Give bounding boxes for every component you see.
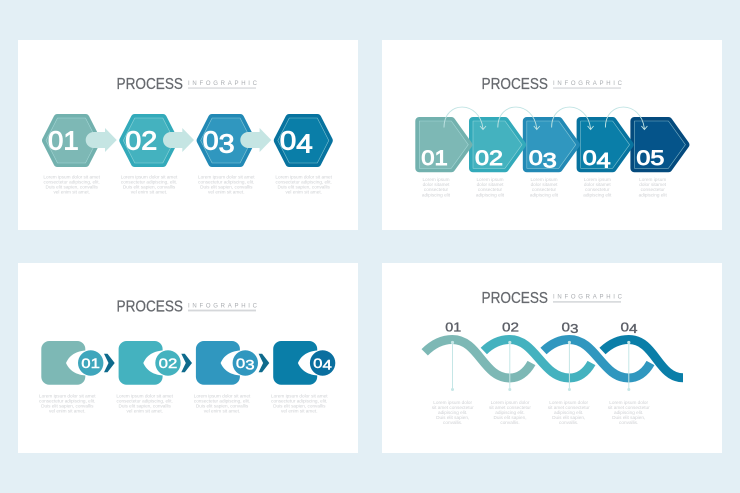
step 1 marker <box>451 341 454 391</box>
chevron 2 <box>181 354 192 372</box>
chevron 1 <box>104 354 115 372</box>
step 1 badge <box>41 341 103 385</box>
step 2 text: Duis elit sapien, convallis <box>123 184 176 189</box>
step 2 text: dolor sitamet <box>477 182 504 187</box>
number 02: 02 <box>502 320 519 335</box>
step 3 text: Lorem ipsum dolor sit amet <box>198 174 255 179</box>
step 4 hexagon: 4 <box>296 128 313 158</box>
step 4 badge: 0 <box>313 355 321 371</box>
step 1 text: Lorem ipsum <box>422 177 450 182</box>
step 5 text: consectetur <box>641 187 665 192</box>
step 4 text: Lorem ipsum dolor <box>609 400 649 405</box>
step 2 text: Duis elit sapien, convallis <box>119 404 172 409</box>
step 1 text: dolor sitamet <box>423 182 450 187</box>
panel: pentagon process <box>382 40 722 230</box>
step 3 text: consectetur adipiscing, elit. <box>194 399 250 404</box>
step 1 hexagon <box>46 118 97 163</box>
step 4 text: Duis elit sapien, convallis <box>278 184 331 189</box>
step 2 text: Lorem ipsum dolor sit amet <box>116 394 174 399</box>
step 2 text: consectetur adipiscing, elit. <box>121 179 177 184</box>
step 5 pentagon <box>634 121 685 170</box>
step 2 hexagon <box>123 118 174 163</box>
step 1 text: Duis elit sapien, convallis <box>41 404 94 409</box>
number 04: 0 <box>620 320 628 335</box>
step 3 pentagon: 3 <box>543 150 557 172</box>
step 1 text: vel enim sit amet. <box>49 409 86 414</box>
step 2 text: convallis. <box>500 420 520 425</box>
step 5 pentagon: 05 <box>636 147 664 170</box>
step 4 text: consectetur adipiscing, elit. <box>271 399 327 404</box>
step 4 text: Lorem ipsum <box>584 177 611 182</box>
step 3 text: convallis. <box>559 420 578 425</box>
step 2 pentagon: 02 <box>475 147 503 170</box>
step 3 badge <box>196 341 258 385</box>
step 2 text: adipiscing elit. <box>495 410 525 415</box>
step 3 text: dolor sitamet <box>531 182 558 187</box>
step 4 text: vel enim sit amet. <box>281 409 318 414</box>
step 4 text: sit amet consectetur <box>608 405 650 410</box>
step 3 text: adipiscing elit <box>530 192 559 197</box>
step 3 text: sit amet consectetur <box>548 405 590 410</box>
step 1 text: Lorem ipsum dolor sit amet <box>43 174 101 179</box>
panel: wave process <box>382 263 722 453</box>
panel: hexagon process <box>18 40 358 230</box>
step 3 text: Lorem ipsum dolor sit amet <box>194 394 251 399</box>
step 2 hexagon: 02 <box>125 125 157 155</box>
step 3 hexagon: 0 <box>203 125 217 155</box>
title: INFOGRAPHIC <box>188 81 258 87</box>
step 2 text: vel enim sit amet. <box>131 189 167 194</box>
arc arrow 2 <box>498 107 540 130</box>
step 4 text: convallis. <box>619 420 638 425</box>
arc arrow 4 <box>605 107 647 130</box>
step 4 text: adipiscing elit <box>583 192 612 197</box>
number 03: 3 <box>570 321 578 336</box>
step 4 pentagon <box>581 121 630 172</box>
step 4 pentagon: 0 <box>583 147 594 170</box>
step 2 badge: 02 <box>159 355 178 371</box>
arc arrow 3 <box>552 107 594 130</box>
step 5 text: Lorem ipsum <box>639 177 666 182</box>
step 4 text: Duis elit sapien, convallis <box>273 404 326 409</box>
title: INFOGRAPHIC <box>188 304 258 310</box>
step 1 hexagon: 01 <box>48 125 79 155</box>
step 1 text: consectetur adipiscing, elit. <box>44 179 100 184</box>
step 3 text: Lorem ipsum <box>530 177 558 182</box>
wave 3 <box>544 340 650 378</box>
step 3 text: Lorem ipsum dolor <box>549 400 589 405</box>
step 2 text: vel enim sit amet. <box>126 409 163 414</box>
step 2 text: Lorem ipsum dolor sit amet <box>121 174 178 179</box>
title <box>482 290 623 307</box>
step 4 text: adipiscing elit. <box>614 410 643 415</box>
step 3 hexagon <box>201 118 252 163</box>
step 4 text: Lorem ipsum dolor sit amet <box>275 174 333 179</box>
step 2 pentagon <box>473 121 522 170</box>
arrow 3 <box>240 128 271 152</box>
title <box>116 298 258 316</box>
wave 4 <box>602 340 683 378</box>
step 1 text: sit amet consectetur <box>432 405 474 410</box>
arc arrow 1 <box>444 107 486 130</box>
step 3 marker <box>568 341 571 391</box>
step 3 badge: 0 <box>236 355 244 371</box>
step 4 badge <box>273 341 335 385</box>
step 3 text: Duis elit sapien, convallis <box>196 404 249 409</box>
title <box>116 76 258 93</box>
step 2 text: consectetur <box>478 187 503 192</box>
step 2 badge <box>119 341 181 385</box>
title <box>482 76 623 93</box>
step 3 text: adipiscing elit. <box>554 410 583 415</box>
step 4 text: Lorem ipsum dolor sit amet <box>271 394 328 399</box>
step 1 text: Duis elit sapien, <box>436 415 469 420</box>
step 1 text: convallis. <box>443 420 462 425</box>
step 2 text: consectetur adipiscing, elit. <box>117 399 173 404</box>
panel: rounded square process <box>18 263 358 453</box>
step 4 text: consectetur <box>585 187 610 192</box>
arrow 1 <box>86 128 117 152</box>
step 4 text: dolor sitamet <box>584 182 611 187</box>
step 3 text: vel enim sit amet. <box>204 409 240 414</box>
wave 1 <box>425 340 532 378</box>
step 1 text: consectetur adipiscing, elit. <box>39 399 95 404</box>
step 5 text: dolor sitamet <box>639 182 667 187</box>
step 3 pentagon <box>527 121 576 172</box>
step 5 text: adipiscing elit <box>639 192 667 197</box>
step 4 text: vel enim sit amet. <box>285 189 322 194</box>
step 2 text: Lorem ipsum <box>476 177 504 182</box>
title: PROCESS <box>482 76 548 93</box>
step 3 hexagon: 3 <box>219 128 235 158</box>
title: PROCESS <box>116 76 183 93</box>
step 1 text: Lorem ipsum dolor <box>433 400 473 405</box>
step 2 text: Lorem ipsum dolor <box>491 400 530 405</box>
number 04: 4 <box>629 321 638 336</box>
step 3 pentagon: 0 <box>529 147 540 170</box>
number 03: 0 <box>562 320 569 335</box>
step 1 text: adipiscing elit. <box>438 410 467 415</box>
step 1 badge: 01 <box>81 355 100 371</box>
step 2 text: sit amet consectetur <box>489 405 531 410</box>
title: PROCESS <box>482 290 548 307</box>
step 3 text: consectetur adipiscing, elit. <box>198 179 254 184</box>
step 1 pentagon <box>419 121 468 170</box>
step 3 text: consectetur <box>532 187 557 192</box>
step 3 text: vel enim sit amet. <box>208 189 245 194</box>
step 4 marker <box>627 341 630 391</box>
chevron 3 <box>259 354 269 372</box>
arrow 2 <box>163 128 194 152</box>
step 3 text: Duis elit sapien, <box>552 415 585 420</box>
title: PROCESS <box>116 298 183 316</box>
step 4 text: consectetur adipiscing, elit. <box>276 179 332 184</box>
title: INFOGRAPHIC <box>553 294 623 300</box>
step 1 text: adipiscing elit <box>422 192 451 197</box>
step 4 hexagon: 0 <box>280 125 294 155</box>
step 4 hexagon <box>278 118 329 163</box>
step 1 text: Lorem ipsum dolor sit amet <box>39 394 96 399</box>
step 2 marker <box>508 341 511 391</box>
step 1 text: vel enim sit amet. <box>53 189 90 194</box>
step 2 text: Duis elit sapien, <box>493 415 527 420</box>
step 4 badge: 4 <box>323 356 332 372</box>
step 1 text: consectetur <box>424 187 449 192</box>
step 1 pentagon: 01 <box>421 147 448 170</box>
number 01: 01 <box>445 320 461 335</box>
step 2 text: adipiscing elit <box>476 192 505 197</box>
wave 2 <box>484 340 592 378</box>
step 3 badge: 3 <box>245 356 255 372</box>
step 4 text: Duis elit sapien, <box>612 415 645 420</box>
step 4 pentagon: 4 <box>597 150 611 172</box>
step 1 text: Duis elit sapien, convallis <box>46 184 99 189</box>
title: INFOGRAPHIC <box>553 81 623 87</box>
step 3 text: Duis elit sapien, convallis <box>200 184 253 189</box>
